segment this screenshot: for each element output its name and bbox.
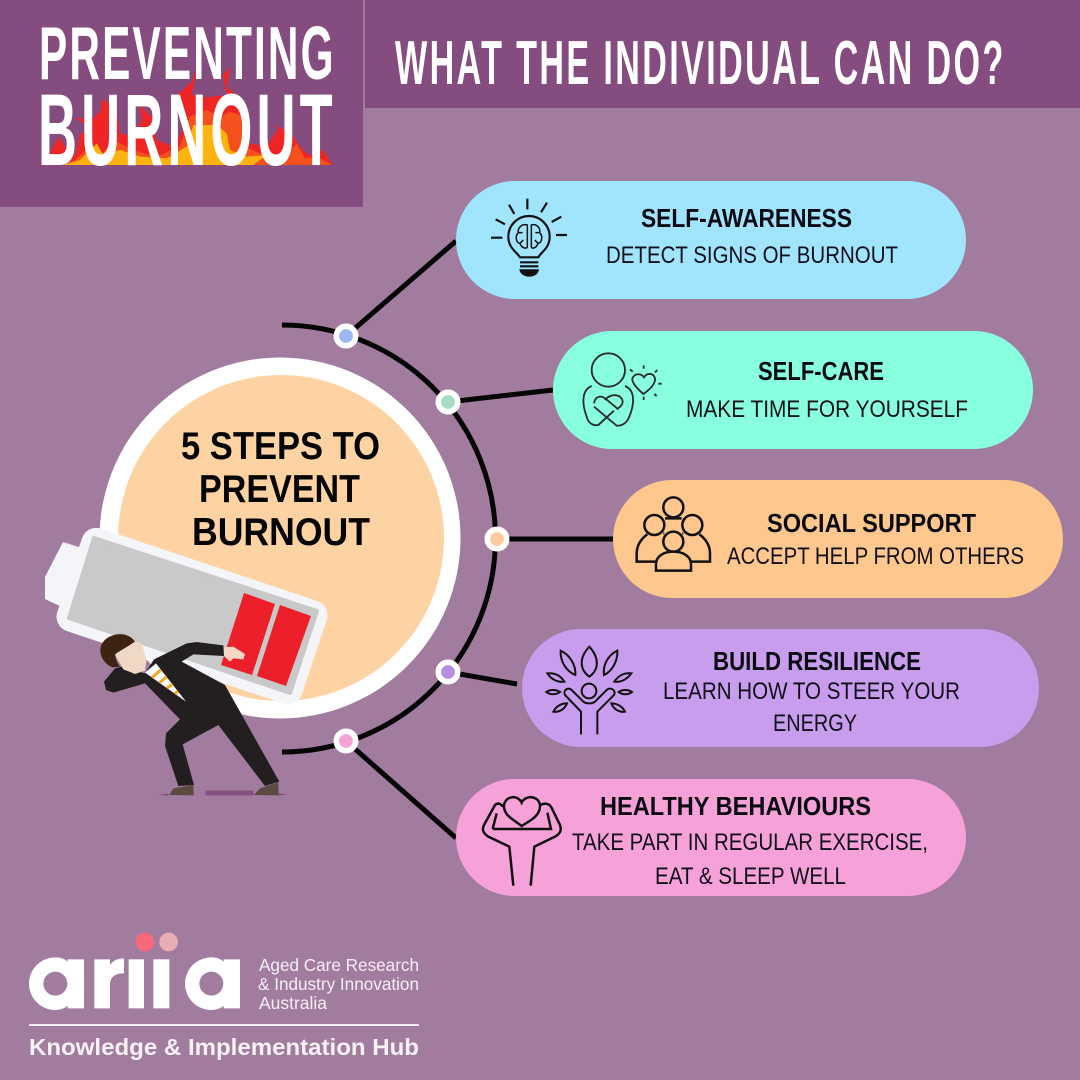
illustration: low battery — [45, 524, 331, 708]
healthy behaviours text: HEALTHY BEHAVIOURS — [600, 791, 871, 821]
panel: self-care — [553, 331, 1033, 449]
panel: subtitle banner: WHAT THE INDIVIDUAL CAN DO? — [395, 28, 1003, 98]
build resilience text — [663, 646, 960, 737]
illustration: flames — [40, 63, 332, 165]
title text — [38, 11, 334, 187]
logo descriptor text: Australia — [259, 993, 327, 1013]
node: build resilience — [438, 662, 458, 682]
self-awareness text: DETECT SIGNS OF BURNOUT — [606, 242, 898, 269]
self-care text: SELF-CARE — [758, 356, 884, 386]
hub label: Knowledge & Implementation Hub — [29, 1034, 419, 1060]
logo: ARIIA — [29, 933, 419, 1060]
node: self-awareness — [336, 326, 356, 346]
build resilience text: BUILD RESILIENCE — [713, 646, 921, 676]
node: social support — [487, 529, 507, 549]
healthy behaviours text: TAKE PART IN REGULAR EXERCISE, — [572, 829, 928, 856]
icon: person holding heart — [483, 797, 561, 886]
social support text — [727, 508, 1024, 570]
central heading: 5 STEPS TO — [181, 425, 380, 468]
title text: BURNOUT — [38, 74, 333, 187]
build resilience text: ENERGY — [773, 710, 857, 737]
self-awareness text — [606, 203, 898, 269]
self-care text — [686, 356, 968, 423]
logo descriptor text — [258, 955, 419, 1013]
logo descriptor text: & Industry Innovation — [258, 974, 419, 994]
social support text: SOCIAL SUPPORT — [767, 508, 976, 538]
social support text: ACCEPT HELP FROM OTHERS — [727, 543, 1024, 570]
node: healthy behaviours — [336, 731, 356, 751]
panel: subtitle banner — [365, 0, 1080, 108]
node: self-care — [438, 392, 458, 412]
logo descriptor text: Aged Care Research — [259, 955, 419, 975]
panel: healthy behaviours — [456, 779, 966, 896]
illustration: man carrying battery — [100, 634, 288, 796]
logo mark — [29, 933, 240, 1010]
icon: group of people — [637, 497, 710, 571]
healthy behaviours text: EAT & SLEEP WELL — [655, 863, 846, 890]
panel: self-awareness — [456, 181, 966, 299]
panel: social support — [613, 480, 1063, 598]
icon: person as tree — [546, 647, 632, 734]
central heading — [181, 425, 380, 554]
connector lines — [282, 241, 613, 838]
self-care text: MAKE TIME FOR YOURSELF — [686, 396, 968, 423]
icon: self-hug with heart — [583, 353, 662, 426]
central heading: PREVENT — [199, 468, 360, 511]
icon: lightbulb with brain — [491, 199, 567, 276]
central circle — [100, 358, 460, 718]
panel: build resilience — [522, 629, 1039, 747]
title text: PREVENTING — [39, 11, 334, 95]
build resilience text: LEARN HOW TO STEER YOUR — [663, 678, 960, 705]
central heading: BURNOUT — [192, 511, 370, 554]
self-awareness text: SELF-AWARENESS — [641, 203, 852, 233]
healthy behaviours text — [572, 791, 928, 890]
panel: title block — [0, 0, 363, 207]
